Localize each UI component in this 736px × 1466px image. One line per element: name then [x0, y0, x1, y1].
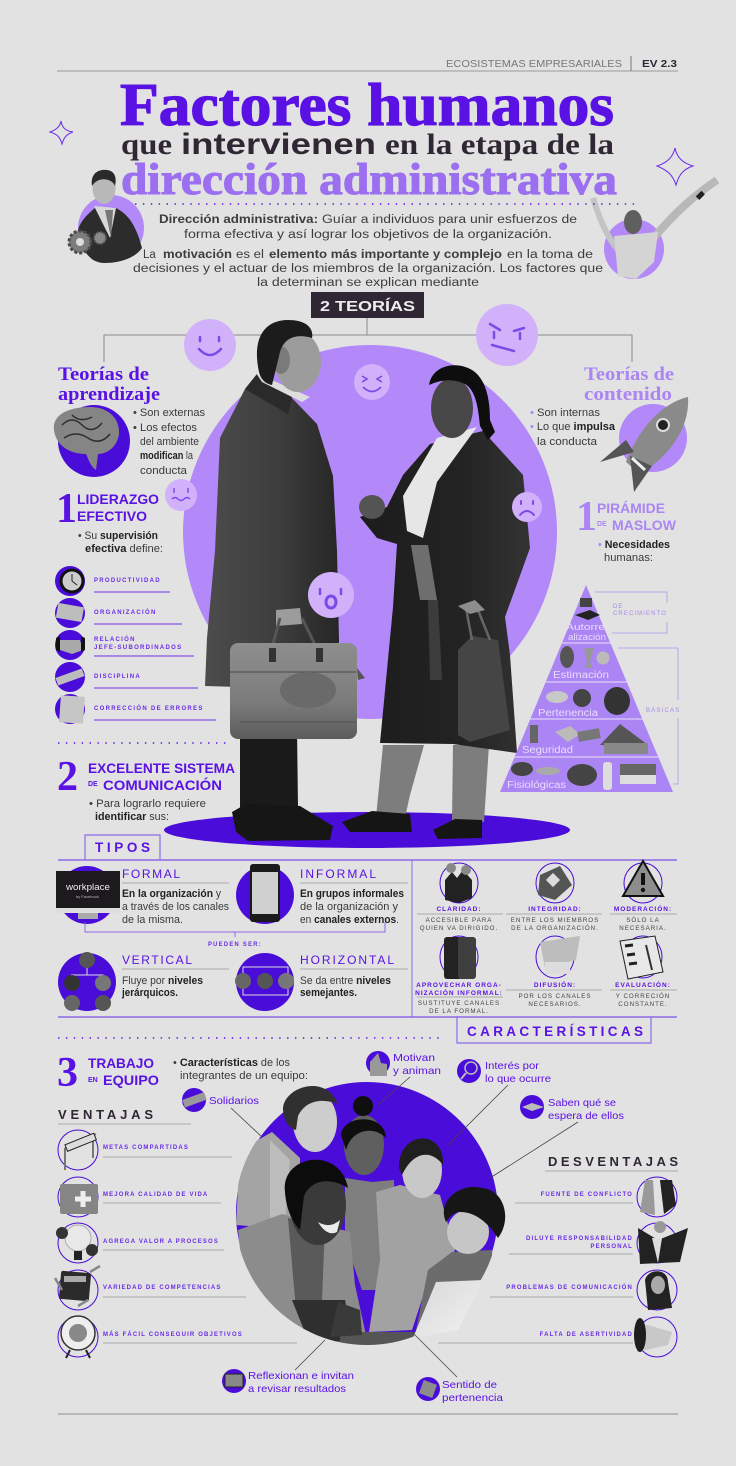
bracket: de crecimiento: [595, 592, 667, 633]
header strip: [57, 56, 678, 71]
intro text: en la toma de: [507, 249, 593, 261]
emoji: sad: [512, 492, 542, 522]
item: disciplina: [55, 662, 198, 692]
intro text: la determinan se explican mediante: [257, 277, 479, 289]
text: integrantes: • Características de los: [173, 1057, 290, 1069]
emoji: angry: [476, 304, 538, 366]
2 teorias label: [311, 292, 424, 318]
communication: formal: de la misma.: [122, 914, 183, 926]
connector lines: [104, 318, 632, 362]
level: fisiologicas: [507, 762, 656, 791]
item: objetivos: MÁS FÁCIL CONSEGUIR OBJETIVOS: [103, 1331, 243, 1338]
divider dots: [135, 203, 636, 205]
callout: motivan: [366, 1051, 441, 1077]
item: productividad: PRODUCTIVIDAD: [94, 578, 161, 584]
panel: ventajas: [55, 1107, 297, 1358]
text: content bullets: [530, 407, 616, 448]
intro text: elemento más importante y complejo: [269, 249, 502, 261]
intro text: [133, 214, 603, 289]
intro text: decisiones y el actuar de los miembros de la organización. Los factores que: [133, 263, 603, 275]
level: autorrealizacion: Autorre-: [566, 622, 609, 632]
bracket: pueden ser: PUEDEN SER:: [208, 942, 262, 948]
emoji: surprised: [308, 572, 354, 618]
communication: informal: En grupos informales: [300, 888, 404, 900]
level: seguridad: Seguridad: [522, 745, 573, 756]
characteristic: integridad: ENTRE LOS MIEMBROS: [511, 917, 599, 924]
characteristic: integridad: INTEGRIDAD:: [528, 906, 582, 913]
intro text: forma efectiva y así lograr los objetivos de la organización.: [184, 229, 552, 241]
callout: sentido: pertenencia: [442, 1392, 503, 1404]
communication: horizontal: semejantes.: [300, 987, 357, 999]
header strip: ECOSISTEMAS EMPRESARIALES: [446, 58, 622, 70]
heading: content theories: Teorías de: [584, 364, 674, 385]
item: relacion: [55, 630, 194, 660]
heading: liderazgo efectivo: 1: [56, 486, 77, 532]
2 teorias label: 2 TEORÍAS: [320, 298, 415, 315]
characteristic: integridad: [506, 863, 602, 932]
level: seguridad: [522, 724, 648, 756]
ground ellipse: [164, 812, 570, 848]
left person: [205, 320, 339, 841]
characteristic: claridad: QUIEN VA DIRIGIDO.: [420, 925, 498, 932]
bracket: basicas: BÁSICAS: [646, 707, 680, 714]
heading: piramide de maslow: 1: [576, 494, 597, 540]
tipos tab and frame: [58, 835, 677, 860]
text: supervision: • Su supervisión: [78, 530, 158, 542]
communication: formal: by Facebook: [76, 894, 99, 899]
title: intervienen: [181, 128, 376, 161]
level: fisiologicas: Fisiológicas: [507, 780, 566, 791]
heading: learning theories: [58, 364, 160, 405]
text: supervision: efectiva define:: [85, 543, 163, 555]
characteristic: claridad: [417, 863, 503, 932]
callout lines: [231, 1077, 578, 1377]
title: en la etapa de la: [385, 128, 614, 161]
heading: piramide de maslow: [576, 494, 677, 540]
callout: saben: [520, 1095, 624, 1122]
tipos tab and frame: TIPOS: [95, 840, 150, 855]
text: learning bullets: [133, 407, 205, 477]
text: learning bullets: • Son externas: [133, 407, 205, 419]
communication: informal: [236, 864, 408, 926]
heading: excelente sistema de comunicacion: 2: [57, 754, 78, 800]
communication: formal: [56, 866, 229, 926]
communication: formal: FORMAL: [122, 867, 182, 881]
caracteristicas tab: [58, 1017, 677, 1043]
heading: ventajas: VENTAJAS: [58, 1107, 153, 1122]
characteristic: moderacion: MODERACIÓN:: [614, 904, 672, 913]
text: identificar: • Para lograrlo requiere: [89, 798, 206, 810]
communication: vertical: [58, 952, 229, 1011]
text: identificar: identificar sus:: [95, 811, 169, 823]
emoji: wink: [354, 364, 390, 400]
communication: horizontal: HORIZONTAL: [300, 953, 396, 967]
item: correccion: [55, 694, 216, 724]
chart: maslow pyramid: [500, 585, 673, 792]
text: identificar: [89, 798, 206, 823]
item: calidad: MEJORA CALIDAD DE VIDA: [103, 1192, 208, 1198]
item: metas: METAS COMPARTIDAS: [103, 1145, 189, 1151]
divider dots: [58, 742, 226, 744]
bracket: pueden ser: [85, 922, 385, 948]
emoji: smile: [184, 319, 236, 371]
intro text: La: [143, 249, 156, 261]
item: conflicto: FUENTE DE CONFLICTO: [541, 1192, 633, 1198]
heading: content theories: contenido: [584, 384, 672, 405]
callout: reflexionan: [222, 1369, 354, 1395]
callout: motivan: Motivan: [393, 1052, 435, 1064]
characteristic: claridad: ACCESIBLE PARA: [426, 917, 492, 924]
intro text: es el: [236, 249, 264, 261]
text: integrantes: [173, 1057, 308, 1082]
heading: liderazgo efectivo: LIDERAZGO: [77, 491, 159, 507]
title: [120, 72, 617, 204]
heading: trabajo en equipo: EN: [88, 1077, 98, 1084]
level: pertenencia: Pertenencia: [538, 708, 598, 719]
emoji: crying: [165, 479, 197, 511]
item: organizacion: [55, 598, 182, 628]
characteristic: moderacion: [610, 861, 677, 932]
item: relacion: JEFE-SUBORDINADOS: [94, 645, 182, 651]
icon: manager with gears: [69, 170, 144, 263]
heading: piramide de maslow: DE: [597, 521, 607, 528]
bracket: de crecimiento: DE: [613, 604, 624, 610]
item: productividad: [55, 566, 170, 596]
heading: excelente sistema de comunicacion: EXCELENTE SISTEMA: [88, 761, 235, 776]
characteristic: moderacion: NECESARIA.: [619, 925, 667, 932]
item: correccion: CORRECCIÓN DE ERRORES: [94, 704, 204, 712]
item: conflicto: [515, 1177, 677, 1217]
text: content bullets: la conducta: [537, 436, 598, 448]
characteristics grid: [415, 861, 677, 1015]
item: competencias: VARIEDAD DE COMPETENCIAS: [103, 1285, 222, 1291]
heading: liderazgo efectivo: [56, 486, 159, 532]
communication: vertical: VERTICAL: [122, 953, 194, 967]
callout: interes: lo que ocurre: [485, 1073, 551, 1085]
item: valor: [56, 1223, 224, 1263]
icon: brain: [54, 405, 130, 477]
communication: formal: a través de los canales: [122, 901, 229, 913]
callout: sentido: Sentido de: [442, 1379, 497, 1391]
communication: formal: workplace: [65, 882, 110, 892]
item: responsabilidad: DILUYE RESPONSABILIDAD: [526, 1236, 633, 1242]
communication: informal: en canales externos.: [300, 914, 399, 926]
divider dots: [58, 1037, 443, 1039]
heading: piramide de maslow: PIRÁMIDE: [597, 500, 665, 516]
intro text: motivación: [163, 249, 232, 261]
characteristic: aprovechar: DE LA FORMAL.: [429, 1008, 489, 1015]
big purple circle: [183, 345, 557, 719]
text: integrantes: integrantes de un equipo:: [180, 1070, 308, 1082]
callout: solidarios: Solidarios: [209, 1095, 259, 1107]
communication: informal: INFORMAL: [300, 867, 378, 881]
callout: reflexionan: a revisar resultados: [248, 1383, 346, 1395]
item: objetivos: [58, 1316, 297, 1358]
right person: [342, 365, 530, 839]
text: content bullets: • Lo que impulsa: [530, 421, 616, 433]
item: organizacion: ORGANIZACIÓN: [94, 608, 157, 616]
characteristic: difusion: DIFUSIÓN:: [534, 980, 576, 989]
item: asertividad: [438, 1317, 677, 1357]
text: learning bullets: conducta: [140, 465, 188, 477]
callout: motivan: y animan: [393, 1065, 441, 1077]
panel: desventajas: [438, 1154, 688, 1357]
team photo: [236, 1082, 505, 1345]
heading: learning theories: aprendizaje: [58, 384, 160, 405]
item: competencias: [55, 1266, 246, 1310]
callout: interes: Interés por: [485, 1060, 540, 1072]
text: necesidades: [598, 539, 670, 564]
communication: formal: En la organización y: [122, 888, 221, 900]
text: supervision: [78, 530, 163, 555]
communication: vertical: Fluye por niveles: [122, 975, 203, 987]
characteristic: integridad: DE LA ORGANIZACIÓN.: [511, 925, 599, 932]
item: metas: [58, 1130, 232, 1170]
characteristic: moderacion: SÓLO LA: [626, 917, 660, 924]
icon: cheering man: [593, 180, 717, 279]
callout: interes: [457, 1059, 551, 1085]
callout: solidarios: [182, 1088, 259, 1112]
title: Factores humanos: [120, 72, 614, 138]
bracket: de crecimiento: CRECIMIENTO: [613, 611, 667, 617]
level: autorrealizacion: [566, 598, 609, 642]
callout: reflexionan: Reflexionan e invitan: [248, 1370, 354, 1382]
heading: learning theories: Teorías de: [58, 364, 149, 385]
characteristic: claridad: CLARIDAD:: [436, 906, 482, 913]
communication: horizontal: Se da entre niveles: [300, 975, 391, 987]
characteristic: aprovechar: [415, 936, 503, 1015]
callout: saben: Saben qué se: [548, 1097, 616, 1109]
characteristic: evaluacion: EVALUACIÓN:: [615, 980, 671, 989]
characteristic: evaluacion: Y CORRECIÓN: [616, 993, 670, 1000]
item: disciplina: DISCIPLINA: [94, 674, 141, 680]
heading: trabajo en equipo: [57, 1050, 159, 1096]
intro text: Dirección administrativa:: [159, 214, 318, 226]
characteristic: aprovechar: NIZACIÓN INFORMAL:: [415, 988, 503, 997]
item: valor: AGREGA VALOR A PROCESOS: [103, 1239, 219, 1245]
level: estimacion: [553, 646, 610, 681]
text: learning bullets: modifican la: [140, 450, 194, 462]
heading: content theories: [584, 364, 674, 405]
communication: informal: de la organización y: [300, 901, 398, 913]
icon: right star: [657, 148, 693, 185]
intro text: Guíar a individuos para unir esfuerzos de: [322, 214, 577, 226]
characteristic: difusion: NECESARIOS.: [528, 1001, 582, 1008]
characteristic: difusion: [506, 936, 602, 1008]
level: pertenencia: [538, 687, 630, 719]
heading: trabajo en equipo: TRABAJO: [88, 1055, 154, 1071]
characteristic: evaluacion: CONSTANTE.: [618, 1001, 668, 1008]
item: comunicacion: [490, 1270, 677, 1310]
text: learning bullets: • Los efectos: [133, 422, 197, 434]
text: necesidades: • Necesidades: [598, 539, 670, 551]
item: asertividad: FALTA DE ASERTIVIDAD: [540, 1332, 633, 1338]
header strip: EV 2.3: [642, 59, 677, 70]
callout: saben: espera de ellos: [548, 1110, 624, 1122]
heading: excelente sistema de comunicacion: DE: [88, 781, 98, 788]
text: learning bullets: del ambiente: [140, 436, 199, 448]
text: necesidades: humanas:: [604, 552, 653, 564]
level: estimacion: Estimación: [553, 670, 609, 681]
title: dirección administrativa: [121, 155, 617, 204]
heading: piramide de maslow: MASLOW: [612, 517, 677, 533]
item: responsabilidad: [509, 1221, 688, 1264]
characteristic: evaluacion: [610, 936, 677, 1008]
icon: left star: [50, 121, 73, 144]
bracket: basicas: [618, 648, 680, 784]
item: calidad: [58, 1177, 221, 1217]
icon: brown leather briefcase: [230, 618, 365, 739]
icon: rocket: [600, 397, 688, 492]
characteristic: aprovechar: SUSTITUYE CANALES: [418, 1000, 500, 1007]
caracteristicas tab: CARACTERÍSTICAS: [467, 1024, 643, 1039]
callout: sentido: [416, 1377, 503, 1404]
item: relacion: RELACIÓN: [94, 635, 136, 643]
text: content bullets: • Son internas: [530, 407, 600, 419]
heading: trabajo en equipo: 3: [57, 1050, 78, 1096]
heading: excelente sistema de comunicacion: [57, 754, 235, 800]
item: comunicacion: PROBLEMAS DE COMUNICACIÓN: [506, 1283, 633, 1291]
item: responsabilidad: PERSONAL: [590, 1244, 633, 1250]
heading: trabajo en equipo: EQUIPO: [103, 1072, 159, 1088]
communication: horizontal: [235, 953, 408, 1011]
heading: excelente sistema de comunicacion: COMUNICACIÓN: [103, 776, 222, 793]
level: autorrealizacion: alización: [568, 632, 606, 642]
list: leadership outcomes: [55, 566, 216, 724]
characteristic: aprovechar: APROVECHAR ORGA-: [416, 982, 502, 989]
heading: liderazgo efectivo: EFECTIVO: [77, 508, 147, 524]
heading: desventajas: DESVENTAJAS: [548, 1154, 678, 1169]
communication: vertical: jerárquicos.: [121, 987, 178, 999]
title: que: [121, 128, 172, 161]
characteristic: difusion: POR LOS CANALES: [518, 993, 592, 1000]
